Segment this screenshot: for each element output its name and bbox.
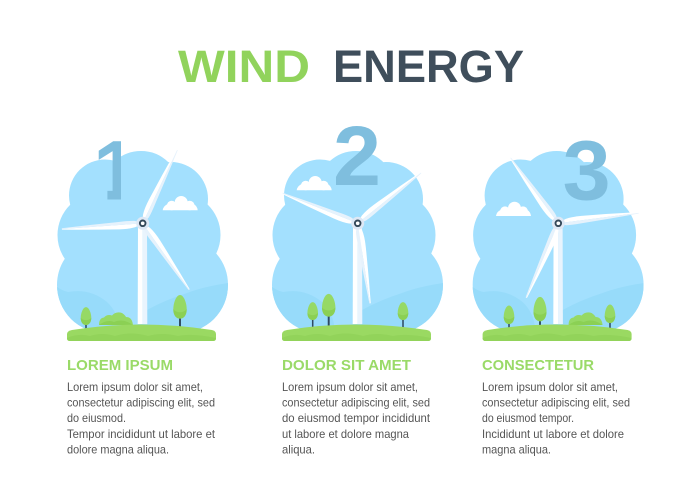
icon: small cloud (163, 196, 198, 210)
number 3: 3 (563, 123, 611, 217)
text block 2: Lorem ipsum dolor sit amet, (282, 380, 418, 394)
text block 1 (67, 380, 216, 456)
text block 1: Tempor incididunt ut labore et (67, 427, 216, 441)
number 1: 1 (93, 123, 140, 217)
turbine blades (62, 148, 193, 292)
title: ENERGY (333, 41, 524, 92)
heading 1: LOREM IPSUM (67, 357, 173, 374)
icon: small cloud (297, 176, 332, 190)
text block 1: dolore magna aliqua. (67, 442, 169, 456)
text block 3: magna aliqua. (482, 442, 551, 456)
heading 2: DOLOR SIT AMET (282, 357, 411, 374)
text block 2: consectetur adipiscing elit, sed (282, 396, 430, 410)
text block 3: Incididunt ut labore et dolore (482, 427, 624, 441)
text block 3: do eiusmod tempor. (482, 411, 574, 425)
text block 2 (282, 380, 431, 456)
text block 3: consectetur adipiscing elit, sed (482, 396, 630, 410)
text block 2: do eiusmod tempor incididunt (282, 411, 431, 425)
panel: turbine 1 (57, 141, 228, 341)
heading 3: CONSECTETUR (482, 357, 594, 374)
text block 2: aliqua. (282, 442, 315, 456)
text block 3: Lorem ipsum dolor sit amet, (482, 380, 618, 394)
text block 2: ut labore et dolore magna (282, 427, 409, 441)
title (178, 41, 524, 92)
icon: small cloud (496, 202, 531, 216)
panel: turbine 3 (466, 123, 651, 341)
text block 3 (482, 380, 630, 456)
trees and bush (504, 297, 615, 333)
text block 1: Lorem ipsum dolor sit amet, (67, 380, 203, 394)
turbine blades (281, 169, 423, 304)
trees (307, 294, 408, 329)
panel: turbine 2 (265, 145, 450, 341)
number 2: 2 (333, 109, 381, 203)
title: WIND (178, 41, 310, 92)
turbine blades (507, 156, 639, 299)
trees and bush (81, 295, 187, 334)
text block 1: consectetur adipiscing elit, sed (67, 396, 215, 410)
text block 1: do eiusmod. (67, 411, 126, 425)
